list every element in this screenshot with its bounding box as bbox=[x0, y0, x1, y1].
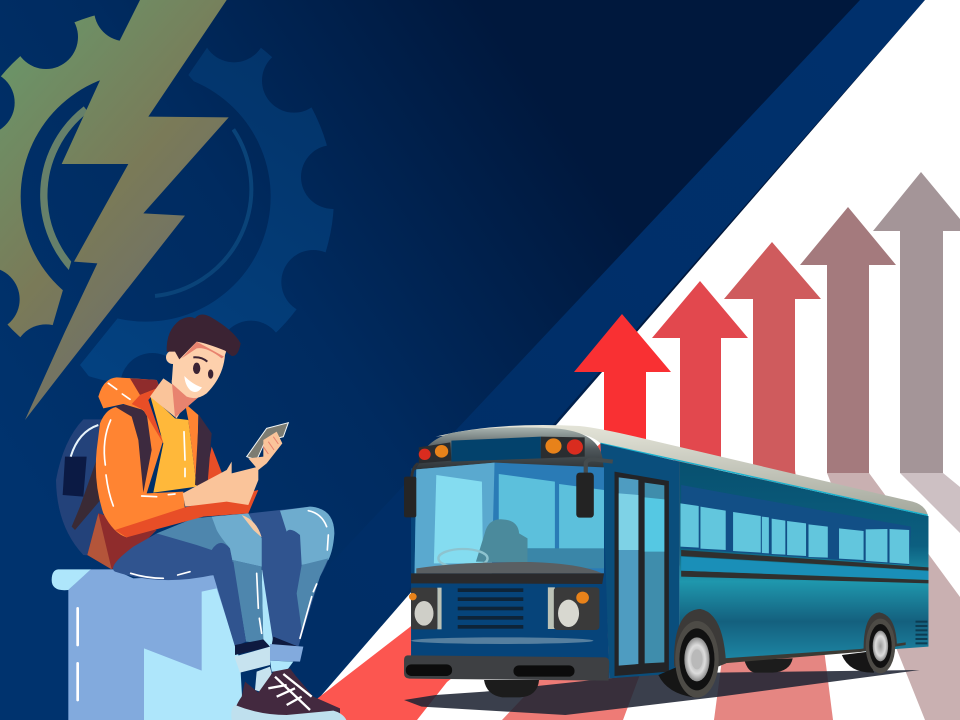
rear axle under-body bbox=[744, 658, 793, 673]
yellow shirt bbox=[150, 395, 197, 493]
jacket lower back bbox=[87, 513, 157, 569]
bus shadow bbox=[404, 670, 920, 715]
olive gear half bbox=[0, 16, 120, 338]
arrow 5 bbox=[873, 172, 960, 473]
roof strip bbox=[436, 425, 928, 515]
left headlight bbox=[409, 588, 442, 629]
hips and thigh bbox=[113, 507, 334, 647]
side window panes bbox=[680, 503, 909, 564]
front wheel arch bbox=[674, 609, 726, 667]
denim light patches bbox=[157, 507, 334, 647]
forearm and hand bbox=[183, 462, 258, 507]
dashboard bbox=[416, 562, 602, 573]
rising arrows bbox=[300, 172, 960, 720]
driver seat bbox=[476, 519, 528, 563]
marker lights bbox=[419, 437, 585, 463]
backpack straps bbox=[115, 403, 152, 493]
jacket torso bbox=[96, 407, 185, 537]
hood bar bbox=[411, 573, 604, 584]
destination sign bbox=[451, 437, 541, 462]
jacket front right bbox=[185, 403, 198, 487]
seated young man with phone bbox=[52, 315, 347, 720]
arrow 1 bbox=[574, 314, 671, 450]
left mirror bbox=[404, 463, 418, 517]
rear wheel arch bbox=[864, 612, 897, 650]
steering wheel bbox=[438, 549, 488, 568]
phone bbox=[247, 423, 288, 460]
eyes bbox=[193, 363, 200, 374]
smile bbox=[184, 376, 202, 392]
front cap bbox=[415, 427, 604, 470]
bus bbox=[404, 425, 928, 715]
arrow 4 bbox=[800, 207, 896, 473]
side window band bbox=[681, 485, 911, 565]
neck bbox=[150, 378, 190, 418]
door section body bbox=[600, 443, 679, 678]
front highlight bbox=[411, 637, 593, 644]
side panel bbox=[679, 462, 928, 662]
side trim lines bbox=[681, 550, 928, 583]
front axle under-bumper bbox=[484, 680, 539, 697]
right headlight bbox=[548, 587, 599, 630]
gear and lightning bolt emblem bbox=[0, 0, 334, 420]
white diagonal panel bbox=[300, 0, 960, 720]
cyan trim bbox=[600, 443, 928, 515]
front wheel bbox=[658, 621, 719, 698]
blue gear half bbox=[80, 48, 334, 381]
block seat bbox=[52, 563, 281, 720]
hair bbox=[167, 315, 241, 359]
hand holding phone bbox=[248, 432, 282, 470]
jeans cuffs and ankles bbox=[234, 637, 303, 693]
rear vent bbox=[915, 621, 927, 644]
jacket sleeve shadow bbox=[115, 490, 258, 537]
front body bbox=[411, 460, 609, 678]
clothing highlights bbox=[104, 383, 328, 638]
bumper bbox=[404, 655, 609, 681]
sneaker bbox=[231, 668, 347, 720]
door bbox=[615, 472, 669, 676]
diagonal blue band bbox=[240, 0, 925, 720]
windshield bbox=[415, 463, 604, 573]
backpack bbox=[56, 419, 103, 557]
arrow 3 bbox=[724, 242, 821, 476]
right mirror bbox=[576, 459, 613, 518]
head bbox=[166, 315, 241, 398]
stripe floor projections bbox=[300, 440, 960, 720]
rear wheel bbox=[842, 619, 895, 673]
skirt bbox=[723, 642, 906, 663]
hood bbox=[98, 377, 163, 443]
arrow 2 bbox=[652, 281, 748, 460]
grille bbox=[458, 588, 523, 629]
lightning bolt bbox=[25, 0, 229, 420]
